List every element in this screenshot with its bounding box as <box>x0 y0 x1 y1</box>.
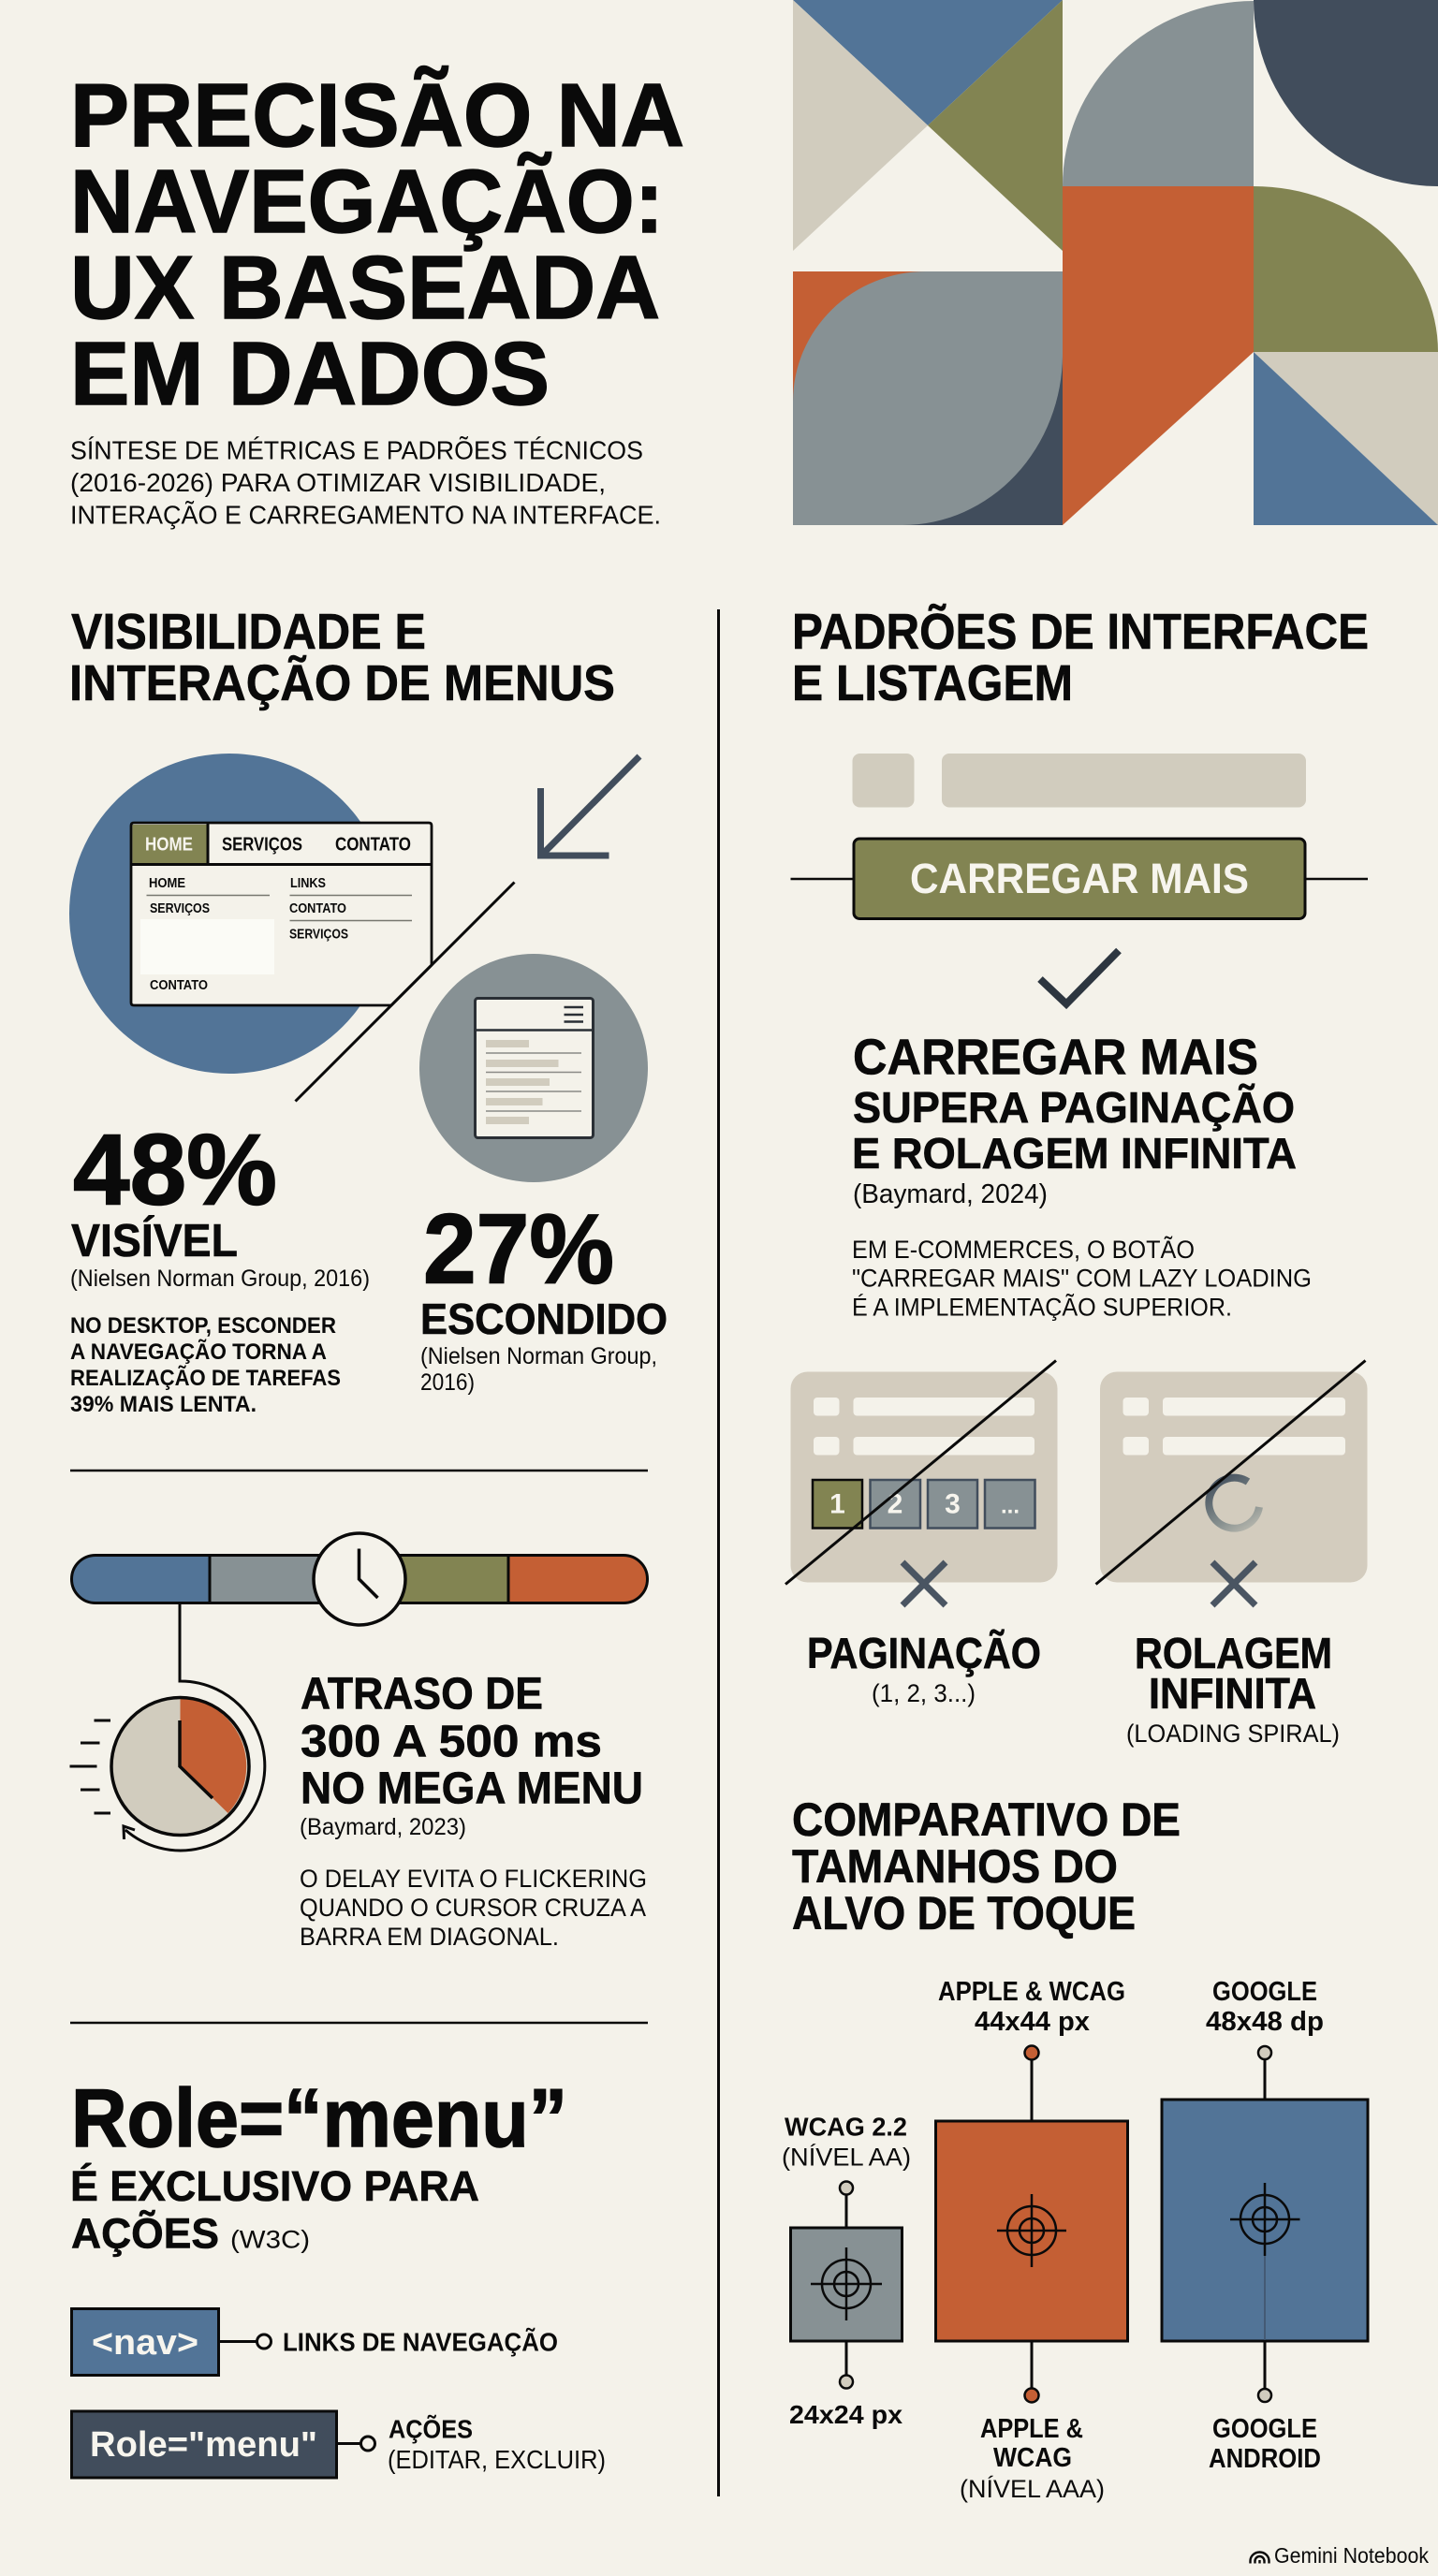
icon: crosshair <box>811 2247 882 2320</box>
title <box>70 65 684 424</box>
panel: pagination mockup <box>785 1361 1058 1605</box>
heading: comparativo de tamanhos: ALVO DE TOQUE <box>792 1887 1136 1939</box>
chart: apple and wcag target: WCAG <box>993 2443 1072 2473</box>
icon: blue circle with desktop menu <box>69 754 432 1074</box>
geometric artwork <box>793 0 1438 525</box>
stat: 27% escondido: ESCONDIDO <box>420 1295 668 1343</box>
label: rolagem infinita: ROLAGEM <box>1135 1629 1332 1677</box>
icon: crosshair <box>1230 2183 1299 2256</box>
code tag: nav <box>71 2308 558 2376</box>
button: carregar mais <box>854 839 1305 919</box>
text: desktop navigation note: REALIZAÇÃO DE TAREFAS <box>70 1365 341 1391</box>
code tag: role menu: (EDITAR, EXCLUIR) <box>388 2445 606 2474</box>
text: atraso de 300 a 500 ms: ATRASO DE <box>301 1670 543 1719</box>
panel: infinite scroll mockup <box>1095 1361 1367 1605</box>
chart: google target: ANDROID <box>1209 2444 1321 2474</box>
desktop menu window <box>131 823 432 1005</box>
label: paginação <box>807 1629 1041 1707</box>
text: delay note: BARRA EM DIAGONAL. <box>300 1923 559 1951</box>
text: desktop navigation note: 39% MAIS LENTA. <box>70 1392 257 1417</box>
chart: wcag 2.2 target <box>782 2112 911 2429</box>
text: e-commerce note: EM E-COMMERCES, O BOTÃO <box>852 1235 1195 1264</box>
stat: 27% escondido: (Nielsen Norman Group, <box>420 1343 657 1369</box>
stat: 27% escondido: 27% <box>423 1194 614 1305</box>
chart: apple and wcag target: (NÍVEL AAA) <box>960 2475 1105 2503</box>
panel: pagination mockup: 2 <box>888 1488 902 1520</box>
code tag: role menu: Role="menu" <box>90 2425 317 2465</box>
subtitle <box>70 436 661 530</box>
text: e-commerce note <box>852 1235 1312 1322</box>
heading: visibilidade e interação de menus: INTERAÇÃO DE MENUS <box>69 655 615 711</box>
chart: apple and wcag target: 44x44 px <box>975 2007 1090 2037</box>
desktop menu window: HOME <box>145 835 193 856</box>
desktop menu window: CONTATO <box>289 901 346 916</box>
text: delay note: O DELAY EVITA O FLICKERING <box>300 1865 647 1893</box>
logo: gemini notebook: Gemini Notebook <box>1274 2543 1429 2568</box>
button: carregar mais: CARREGAR MAIS <box>910 855 1249 902</box>
icon: delay pie timer <box>69 1604 265 1851</box>
chart: wcag 2.2 target: WCAG 2.2 <box>785 2112 907 2142</box>
arrow pointing lower-left <box>541 756 639 856</box>
text: role menu statement <box>70 2071 567 2258</box>
title: NAVEGAÇÃO: <box>70 151 664 252</box>
heading: visibilidade e interação de menus <box>69 604 615 711</box>
text: delay note <box>300 1865 647 1951</box>
subtitle: SÍNTESE DE MÉTRICAS E PADRÕES TÉCNICOS <box>70 436 643 464</box>
text: e-commerce note: É A IMPLEMENTAÇÃO SUPERIOR. <box>852 1292 1232 1322</box>
heading: padrões de interface e listagem: PADRÕES DE INTERFACE <box>792 604 1369 660</box>
chart: google target: GOOGLE <box>1212 2414 1317 2444</box>
stat: 48% visível: 48% <box>73 1112 277 1226</box>
title: UX BASEADA <box>70 238 660 338</box>
label: paginação: (1, 2, 3...) <box>872 1679 976 1707</box>
desktop menu window: LINKS <box>290 876 326 891</box>
code tag: nav: LINKS DE NAVEGAÇÃO <box>283 2327 558 2357</box>
label: paginação: PAGINAÇÃO <box>807 1629 1041 1677</box>
desktop menu window: SERVIÇOS <box>150 901 210 916</box>
label: rolagem infinita: INFINITA <box>1149 1669 1316 1718</box>
text: role menu statement: (W3C) <box>230 2226 310 2254</box>
subtitle: INTERAÇÃO E CARREGAMENTO NA INTERFACE. <box>70 500 661 530</box>
code tag: nav: <nav> <box>92 2323 198 2363</box>
stat: 27% escondido <box>420 1194 668 1396</box>
subtitle: (2016-2026) PARA OTIMIZAR VISIBILIDADE, <box>70 468 606 497</box>
icon: loading spinner <box>1209 1478 1259 1529</box>
panel: pagination mockup: 3 <box>945 1488 961 1520</box>
code tag: role menu: AÇÕES <box>389 2415 473 2443</box>
stat: 48% visível: (Nielsen Norman Group, 2016) <box>70 1266 370 1292</box>
text: atraso de 300 a 500 ms: NO MEGA MENU <box>301 1764 643 1814</box>
text: desktop navigation note: NO DESKTOP, ESCONDER <box>70 1313 336 1339</box>
heading: visibilidade e interação de menus: VISIBILIDADE E <box>71 604 426 660</box>
text: carregar mais supera paginação: SUPERA PAGINAÇÃO <box>853 1083 1295 1132</box>
text: atraso de 300 a 500 ms: (Baymard, 2023) <box>300 1814 466 1840</box>
heading: comparativo de tamanhos: COMPARATIVO DE <box>792 1793 1181 1846</box>
text: carregar mais supera paginação: CARREGAR MAIS <box>853 1030 1258 1086</box>
desktop menu window: HOME <box>149 876 185 891</box>
text: atraso de 300 a 500 ms <box>300 1670 643 1840</box>
stat: 48% visível: VISÍVEL <box>71 1216 238 1266</box>
chart: apple and wcag target: APPLE & WCAG <box>938 1977 1125 2007</box>
label: rolagem infinita <box>1126 1629 1340 1748</box>
icon: gray circle with hamburger menu card <box>419 954 648 1182</box>
title: EM DADOS <box>70 324 550 424</box>
horizontal divider <box>70 1470 648 1471</box>
panel: pagination mockup: 1 <box>829 1488 845 1520</box>
desktop menu window: SERVIÇOS <box>222 835 302 856</box>
stat: 27% escondido: 2016) <box>420 1369 475 1396</box>
text: carregar mais supera paginação <box>852 1030 1297 1209</box>
icon: check mark <box>1040 951 1119 1003</box>
icon: clock <box>314 1533 405 1625</box>
panel: pagination mockup: ... <box>1001 1494 1020 1518</box>
heading: comparativo de tamanhos: TAMANHOS DO <box>792 1840 1118 1893</box>
heading: padrões de interface e listagem: E LISTAGEM <box>792 655 1073 711</box>
text: desktop navigation note: A NAVEGAÇÃO TORNA A <box>70 1339 327 1365</box>
chart: wcag 2.2 target: 24x24 px <box>789 2400 902 2429</box>
icon: crosshair <box>997 2194 1066 2267</box>
text: role menu statement: É EXCLUSIVO PARA <box>70 2162 479 2210</box>
chart: apple and wcag target <box>936 1977 1127 2503</box>
heading: padrões de interface e listagem <box>792 604 1369 711</box>
chart: google target: 48x48 dp <box>1206 2007 1324 2037</box>
icon: x mark <box>1212 1562 1255 1605</box>
text: atraso de 300 a 500 ms: 300 A 500 ms <box>301 1717 602 1767</box>
text: role menu statement: AÇÕES <box>71 2209 219 2258</box>
heading: comparativo de tamanhos <box>792 1793 1181 1939</box>
text: delay note: QUANDO O CURSOR CRUZA A <box>300 1894 646 1922</box>
vertical column divider <box>717 609 720 2496</box>
chart: wcag 2.2 target: (NÍVEL AA) <box>782 2144 911 2172</box>
timeline bar with clock <box>71 1533 648 1625</box>
text: carregar mais supera paginação: E ROLAGEM INFINITA <box>852 1129 1297 1178</box>
horizontal divider <box>70 2022 648 2024</box>
diagonal separator <box>296 882 515 1101</box>
title: PRECISÃO NA <box>70 65 684 166</box>
icon: x mark <box>902 1562 946 1605</box>
text: role menu statement: Role=“menu” <box>71 2071 567 2164</box>
text: e-commerce note: "CARREGAR MAIS" COM LAZY LOADING <box>852 1264 1312 1292</box>
desktop menu window: CONTATO <box>150 978 208 993</box>
chart: google target: GOOGLE <box>1212 1977 1317 2007</box>
chart: apple and wcag target: APPLE & <box>980 2414 1083 2444</box>
desktop menu window: SERVIÇOS <box>289 927 348 942</box>
desktop menu window: CONTATO <box>335 835 411 856</box>
text: carregar mais supera paginação: (Baymard, 2024) <box>853 1179 1048 1209</box>
code tag: role menu <box>71 2411 606 2478</box>
label: rolagem infinita: (LOADING SPIRAL) <box>1126 1720 1340 1748</box>
chart: google target <box>1162 1977 1368 2474</box>
stat: 48% visível <box>70 1112 370 1292</box>
text: desktop navigation note <box>70 1313 341 1417</box>
load more mockup <box>790 754 1368 919</box>
